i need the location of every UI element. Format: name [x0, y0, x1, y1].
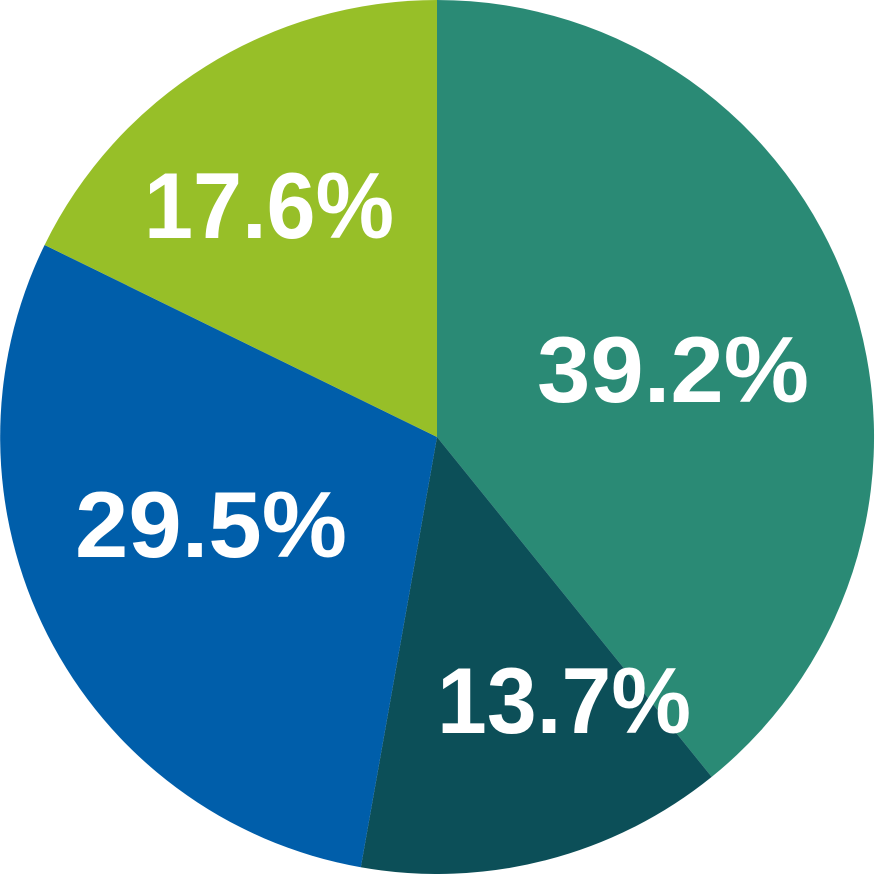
slice: 13.7% dark teal — [361, 437, 712, 874]
slice: 39.2% teal green: 39.2% — [537, 317, 809, 422]
slice: 29.5% blue: 29.5% — [75, 472, 347, 577]
slice: 13.7% dark teal: 13.7% — [437, 648, 691, 753]
slice: 17.6% lime green — [45, 0, 437, 437]
slice: 17.6% lime green: 17.6% — [144, 153, 394, 258]
